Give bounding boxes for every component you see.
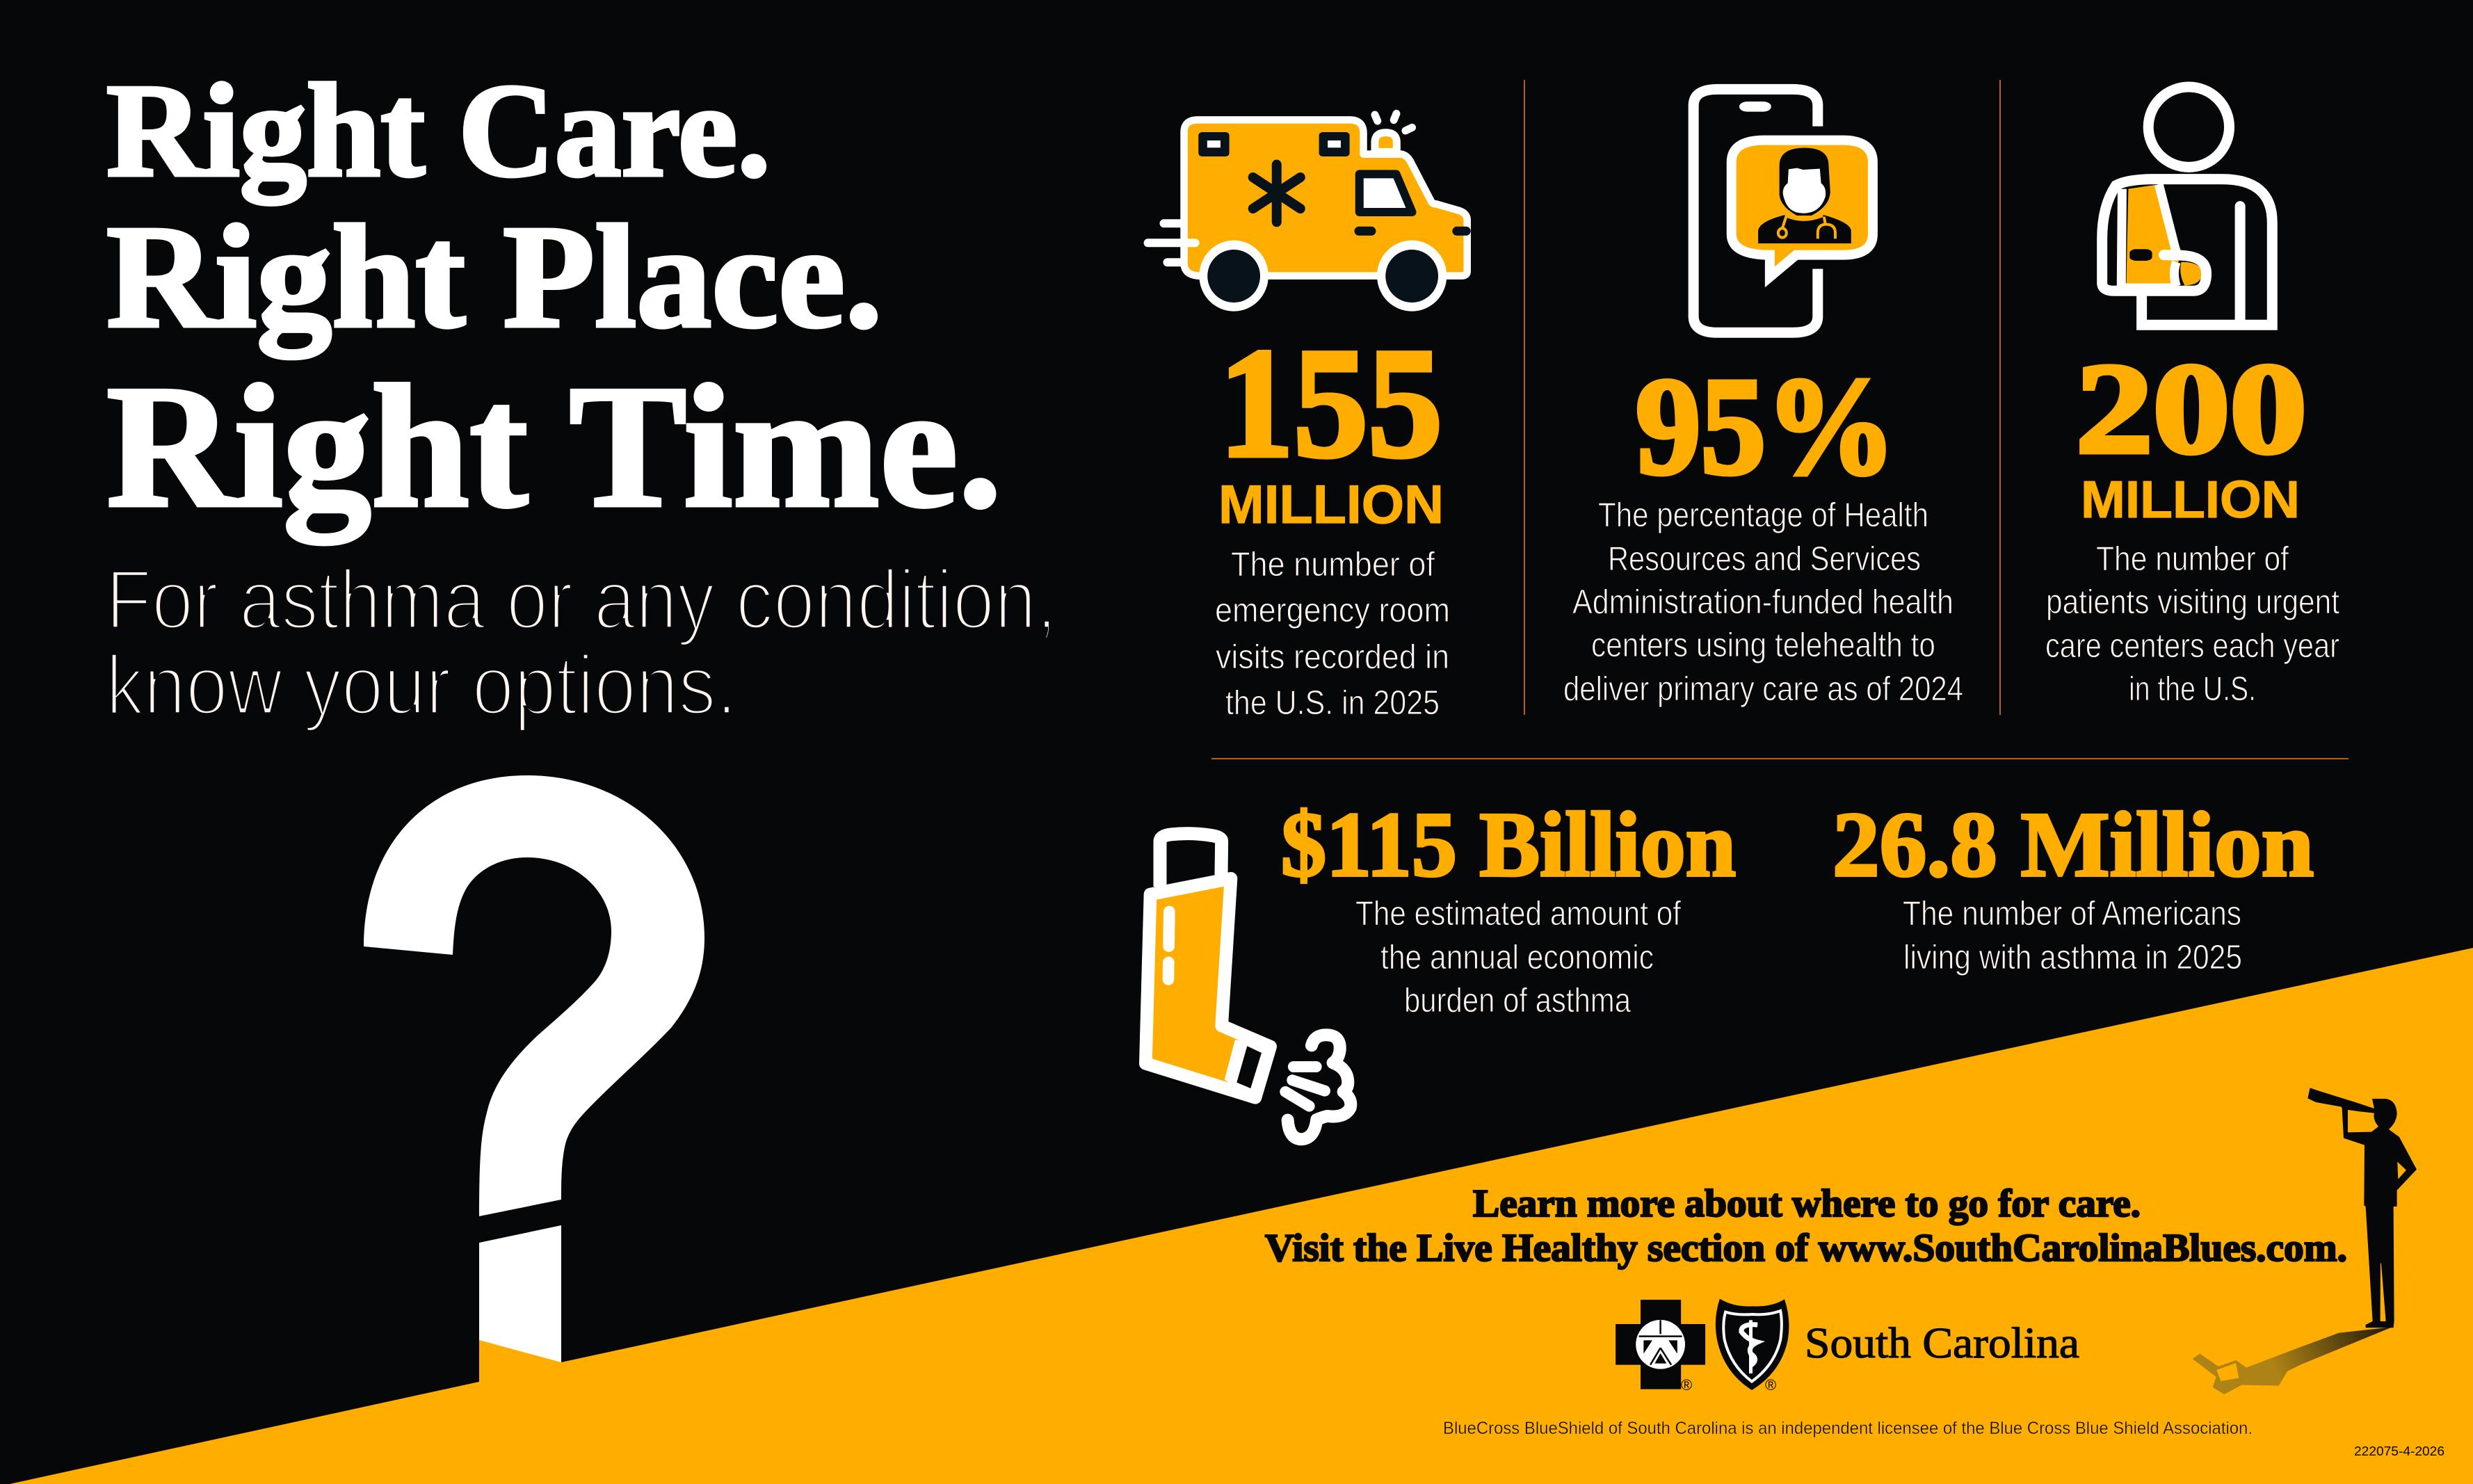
stat: 200 million: care centers each year bbox=[2045, 627, 2339, 665]
logo wordmark: South Carolina bbox=[1805, 1320, 2079, 1367]
icon: large question mark bbox=[364, 775, 704, 1366]
stat: 95% bbox=[1563, 350, 1963, 708]
subtitle bbox=[106, 552, 1057, 732]
yellow diagonal band bbox=[10, 948, 2473, 1484]
stat: 155 million: emergency room bbox=[1215, 592, 1450, 629]
stat: 155 million: MILLION bbox=[1218, 474, 1444, 535]
stat: $115 billion: burden of asthma bbox=[1404, 982, 1632, 1019]
registered mark: ® bbox=[1765, 1376, 1776, 1394]
icon: phone with doctor bbox=[1693, 89, 1873, 332]
title: Right Care. bbox=[106, 56, 771, 205]
stat: $115 billion: The estimated amount of bbox=[1355, 895, 1681, 933]
icon: inhaler with puff bbox=[1145, 834, 1351, 1139]
stat: $115 billion: $115 Billion bbox=[1281, 793, 1736, 896]
stat: 200 million: MILLION bbox=[2081, 470, 2300, 529]
logo: BlueCross BlueShield South Carolina bbox=[1616, 1299, 2079, 1394]
title: Right Place. bbox=[106, 195, 883, 359]
stat: 26.8 million bbox=[1832, 793, 2314, 976]
icon: ambulance bbox=[1148, 113, 1467, 312]
stat: $115 billion bbox=[1281, 793, 1736, 1019]
stat: 200 million: patients visiting urgent bbox=[2046, 583, 2339, 621]
registered marks: ® bbox=[1681, 1376, 1692, 1394]
stat: 26.8 million: living with asthma in 2025 bbox=[1903, 939, 2242, 976]
disclaimer: BlueCross BlueShield of South Carolina is an independent licensee of the Blue Cross Blue Shield Association. bbox=[1443, 1419, 2253, 1438]
stat: 95%: centers using telehealth to bbox=[1591, 627, 1935, 664]
icon: cross bbox=[1616, 1300, 1705, 1389]
stat: 155 million: the U.S. in 2025 bbox=[1225, 684, 1440, 722]
document code: 222075-4-2026 bbox=[2354, 1444, 2444, 1458]
stat: 200 million: in the U.S. bbox=[2129, 670, 2256, 708]
stat: 95%: Administration-funded health bbox=[1572, 583, 1954, 621]
subtitle: For asthma or any condition, bbox=[106, 552, 1057, 647]
stat: 200 million bbox=[2045, 337, 2339, 708]
stat: 95%: The percentage of Health bbox=[1598, 497, 1928, 534]
stat: 95%: deliver primary care as of 2024 bbox=[1563, 670, 1963, 708]
title: Right Time. bbox=[106, 349, 1002, 545]
stat: 155 million: The number of bbox=[1231, 546, 1435, 583]
stat: 200 million: The number of bbox=[2096, 540, 2289, 578]
call to action: Visit the Live Healthy section of www.SouthCarolinaBlues.com. bbox=[1265, 1227, 2347, 1270]
stat: 26.8 million: 26.8 Million bbox=[1832, 793, 2314, 896]
title bbox=[106, 56, 1002, 545]
stat: 155 million bbox=[1215, 316, 1450, 722]
dividers bbox=[1211, 80, 2349, 759]
stat: 95%: 95% bbox=[1636, 350, 1896, 503]
stat: 95%: Resources and Services bbox=[1608, 540, 1921, 578]
stat: 200 million: 200 bbox=[2076, 337, 2307, 481]
icon: person with arm sling bbox=[2102, 87, 2272, 325]
icon: shield bbox=[1716, 1299, 1789, 1390]
call to action bbox=[1265, 1182, 2347, 1270]
icon: man with telescope and shadow bbox=[2193, 1088, 2417, 1394]
stat: 26.8 million: The number of Americans bbox=[1903, 895, 2241, 933]
call to action: Learn more about where to go for care. bbox=[1473, 1182, 2141, 1225]
stat: $115 billion: the annual economic bbox=[1380, 939, 1654, 976]
stat: 155 million: 155 bbox=[1219, 316, 1442, 490]
stat: 155 million: visits recorded in bbox=[1216, 638, 1449, 676]
subtitle: know your options. bbox=[106, 638, 737, 732]
